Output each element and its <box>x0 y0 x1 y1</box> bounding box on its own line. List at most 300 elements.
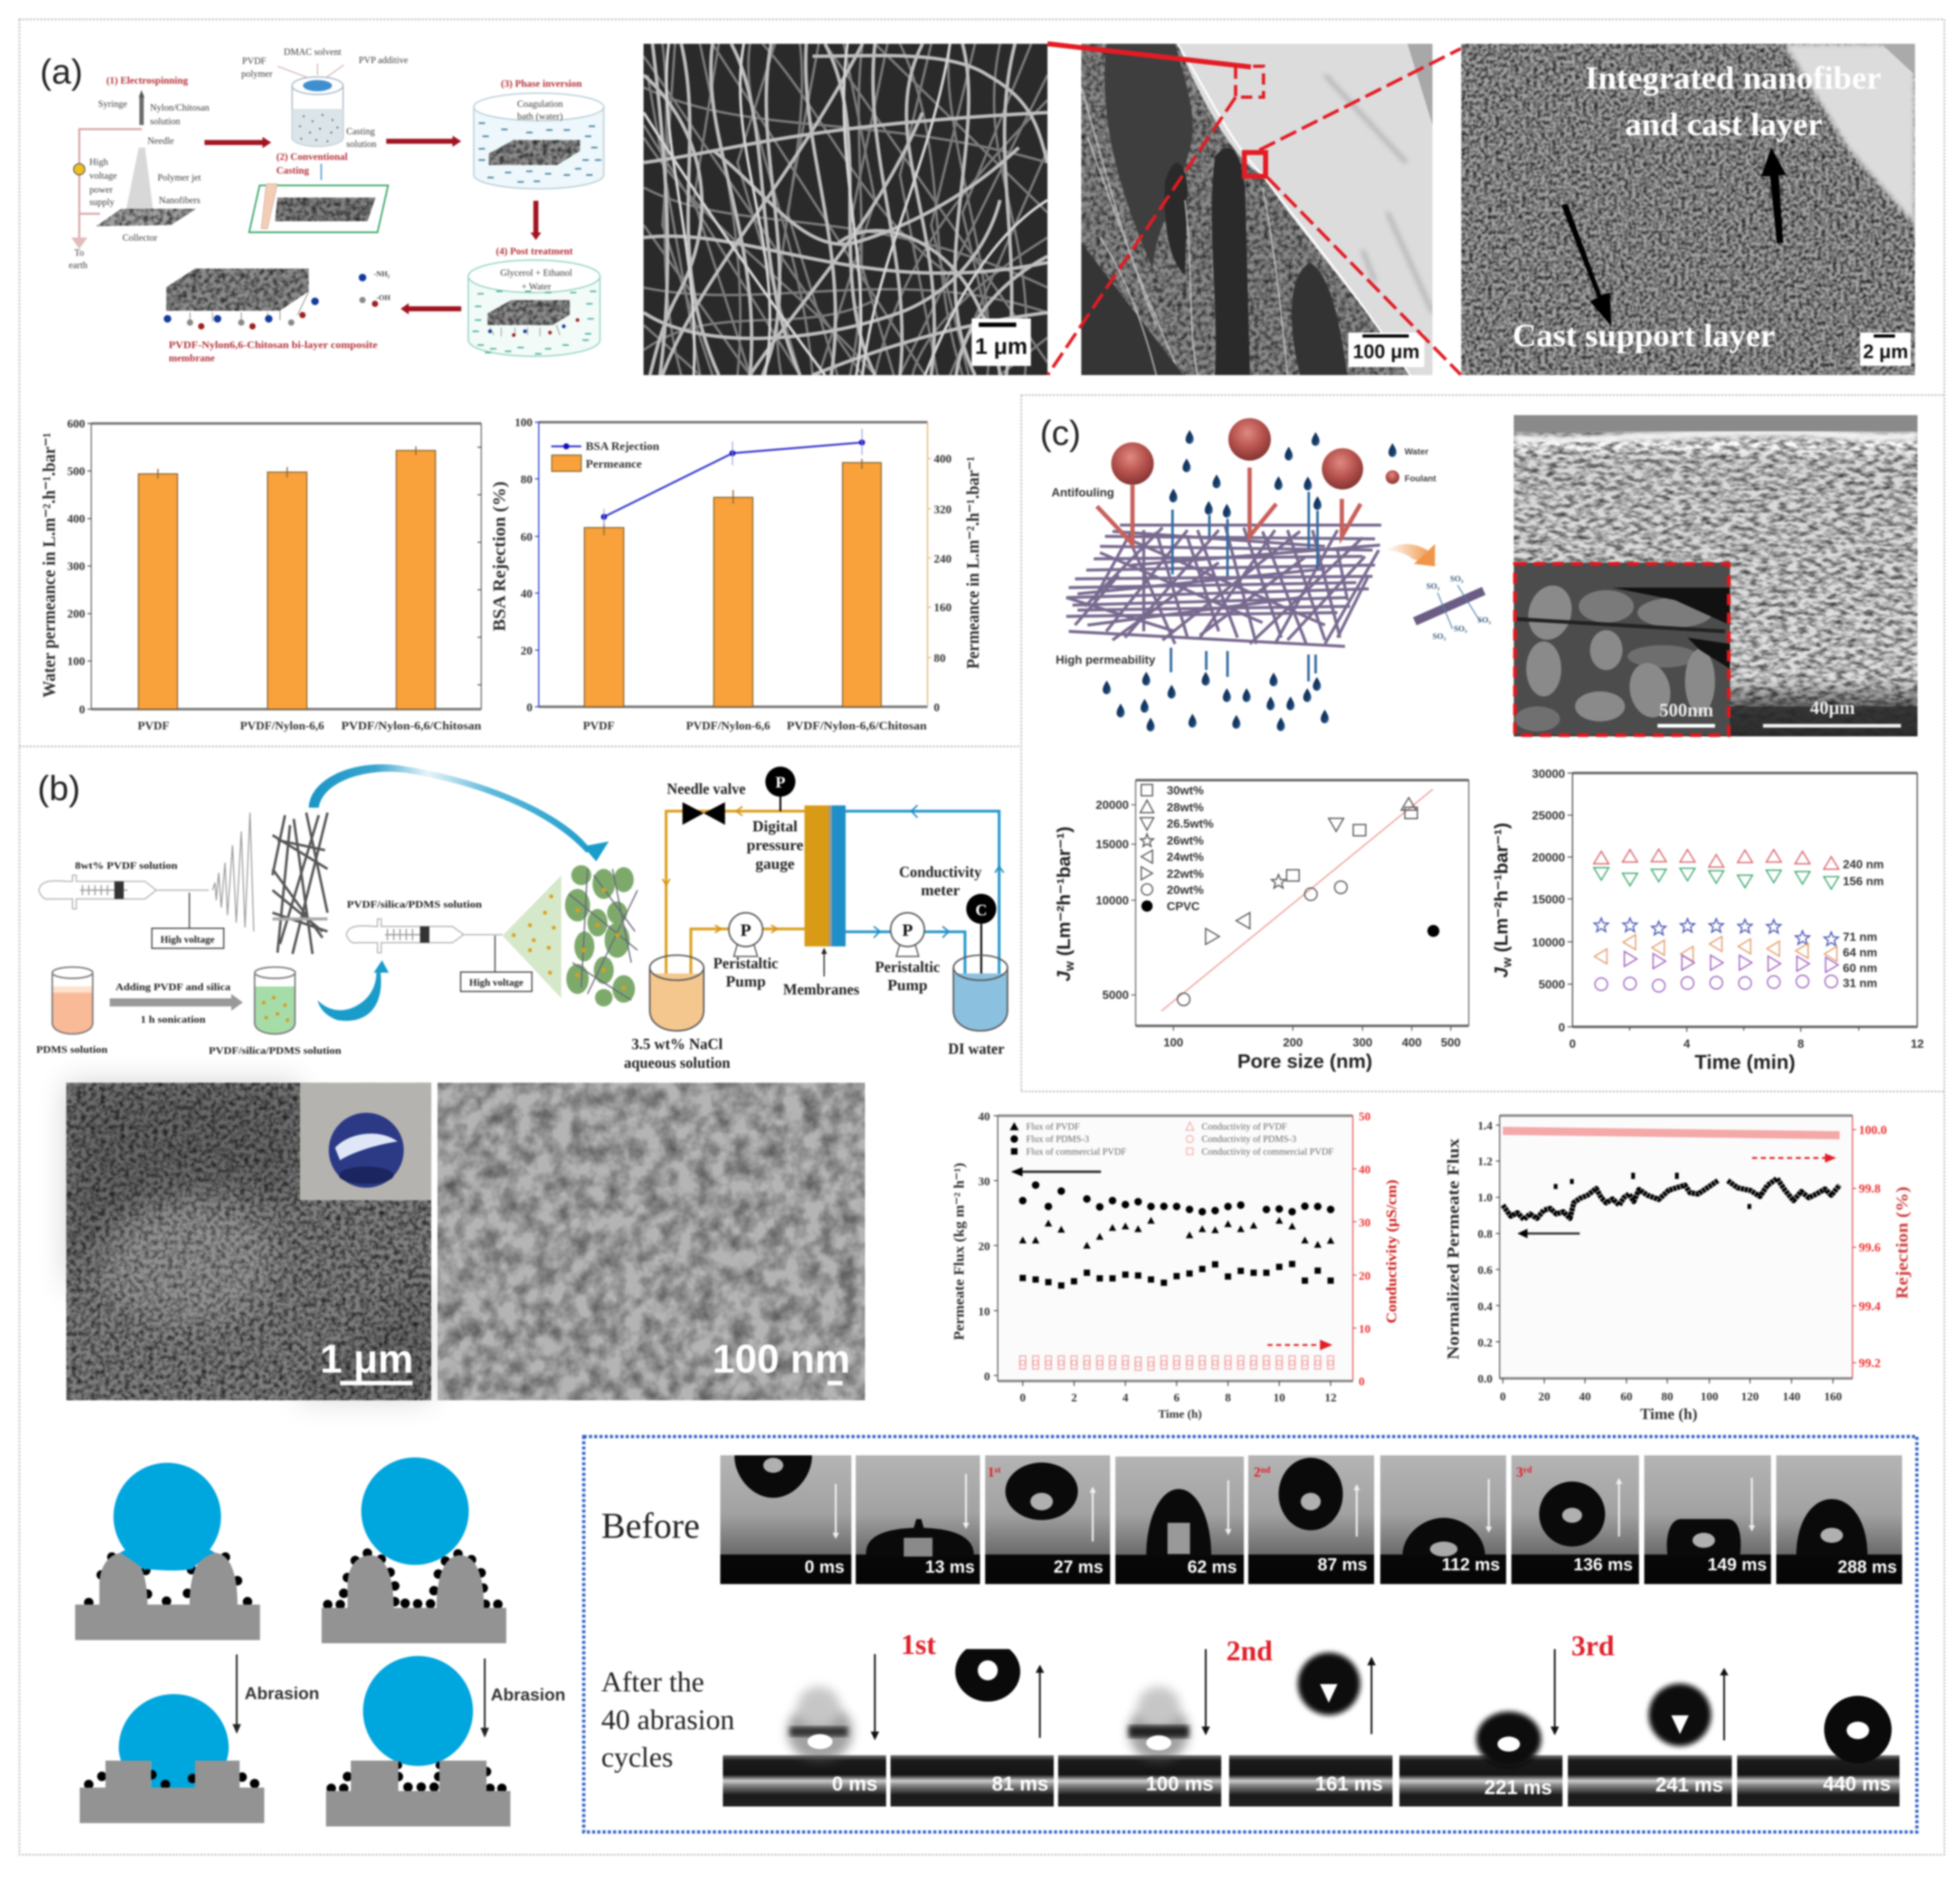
DI water tank <box>948 955 1007 1058</box>
step 2: casting solution beaker: DMAC solvent <box>284 46 341 57</box>
schematic: before abrasion, left <box>75 1463 260 1640</box>
scatter chart: flux vs time: 15000 <box>1532 893 1565 906</box>
bar chart: water permeance: 500 <box>67 464 85 478</box>
time stamps: 161 ms <box>1315 1773 1383 1795</box>
scale label: 100 nm <box>712 1337 850 1382</box>
legend: 24wt% <box>1167 850 1204 864</box>
scatter chart: permeate flux and conductivity: 10 <box>1359 1322 1371 1335</box>
foulant rebound arrows <box>1097 468 1360 544</box>
line chart: normalized flux and rejection: 99.2 <box>1859 1357 1881 1370</box>
rejection line <box>604 442 862 517</box>
step 1: electrospinning: voltage <box>89 170 117 181</box>
step 4: post treatment bath: (4) Post treatment <box>496 246 573 257</box>
foulant spheres <box>1111 418 1363 489</box>
step 4: post treatment bath: + Water <box>521 281 551 291</box>
line chart: normalized flux and rejection: 140 <box>1783 1390 1801 1403</box>
SEM inset: 500nm <box>1659 699 1714 721</box>
label: after the 40 abrasion cycles: 40 abrasion <box>601 1703 735 1736</box>
conductivity meter: meter <box>921 882 960 899</box>
scatter chart: permeate flux and conductivity: 10 <box>1273 1391 1285 1404</box>
line chart: normalized flux and rejection: Rejection (%) <box>1893 1187 1911 1299</box>
droplet panel frame <box>584 1437 1917 1832</box>
pressure gauge: Digital <box>753 818 797 835</box>
rejection band <box>1503 1131 1840 1135</box>
time stamps: 27 ms <box>1054 1558 1103 1577</box>
line chart: normalized flux and rejection: 0 <box>1500 1390 1506 1403</box>
scatter chart: flux vs pore size: 5000 <box>1102 989 1129 1002</box>
scatter chart: flux vs pore size: 20000 <box>1096 798 1129 811</box>
feed tank <box>624 955 730 1072</box>
step 3: phase inversion bath: Coagulation <box>517 99 563 109</box>
legend: 30wt% <box>1167 784 1204 797</box>
conductivity meter <box>899 864 996 991</box>
scale bar 1 um <box>972 318 1031 366</box>
peristaltic pump feed: Pump <box>726 973 766 990</box>
fiber close-up: SO₃ <box>1450 574 1463 583</box>
panel b: electrospinning schematic: PVDF/silica/PDMS solution <box>347 899 482 911</box>
legend: Permeance <box>586 457 642 470</box>
bounce labels: nd <box>1261 1465 1271 1475</box>
legend: Flux of commercial PVDF <box>1026 1146 1126 1156</box>
schematic legend <box>1386 443 1436 484</box>
step 1: electrospinning: earth <box>69 260 88 270</box>
line chart: normalized flux and rejection: 0.8 <box>1478 1227 1492 1240</box>
scatter chart: permeate flux and conductivity: 0 <box>1359 1374 1365 1388</box>
scatter chart: flux vs time: 8 <box>1797 1037 1804 1050</box>
series labels: 60 nm <box>1843 962 1877 975</box>
bar and line chart: BSA rejection: 60 <box>521 530 532 543</box>
small curved arrow <box>318 960 389 1021</box>
series labels: 240 nm <box>1843 858 1884 871</box>
step 1: electrospinning: Nanofibers <box>159 195 201 205</box>
scatter chart: flux vs pore size: 200 <box>1283 1036 1303 1049</box>
time stamps: 136 ms <box>1574 1555 1633 1575</box>
step 4: post treatment bath <box>468 246 600 356</box>
scatter chart: flux vs time: 30000 <box>1532 767 1565 780</box>
panel b: electrospinning schematic: 8wt% PVDF solution <box>75 860 178 871</box>
needle valve <box>667 781 746 825</box>
bouncing sequence: after <box>723 1628 1899 1806</box>
line chart: normalized flux and rejection: 80 <box>1661 1390 1673 1403</box>
schematic: after abrasion, left <box>80 1694 264 1823</box>
y axis titles: BSA Rejection (%) <box>489 481 509 631</box>
pressure gauge <box>747 766 803 873</box>
bar chart: water permeance: PVDF/Nylon-6,6/Chitosan <box>341 719 481 732</box>
panel c: membrane schematic: Antifouling <box>1051 486 1114 499</box>
legend <box>551 440 660 471</box>
legend <box>1140 784 1214 913</box>
series labels: 31 nm <box>1843 977 1877 990</box>
bar and line chart: BSA rejection: 400 <box>934 452 952 465</box>
legend <box>1010 1121 1334 1156</box>
bar and line chart: BSA rejection: Permeance in L.m⁻².h⁻¹.bar⁻¹ <box>963 457 983 669</box>
legend: 20wt% <box>1167 884 1204 897</box>
line chart: normalized flux and rejection: 60 <box>1621 1390 1632 1403</box>
labels on detail SEM <box>1512 60 1881 354</box>
droplet highlights <box>763 1458 1843 1557</box>
data points <box>1177 798 1439 1006</box>
bar and line chart: BSA rejection <box>489 416 983 732</box>
time stamps: 81 ms <box>992 1773 1049 1795</box>
legend: Flux of PDMS-3 <box>1026 1134 1089 1144</box>
peristaltic pump feed: P <box>740 921 751 940</box>
panel b: flow circuit <box>624 766 1007 1072</box>
peristaltic pump feed: Peristaltic <box>713 955 778 972</box>
SEM inset <box>1514 563 1730 735</box>
bar chart: water permeance <box>39 417 481 732</box>
bar and line chart: BSA rejection: 0 <box>527 701 532 714</box>
time stamps: 0 ms <box>805 1558 844 1577</box>
scatter chart: permeate flux and conductivity: 50 <box>1359 1110 1371 1123</box>
panel a: fabrication schematic <box>69 46 604 364</box>
bar chart: water permeance: 300 <box>67 560 85 573</box>
bounce labels <box>987 1464 1533 1480</box>
feed tank: aqueous solution <box>624 1055 730 1072</box>
step 1: electrospinning: Polymer jet <box>157 172 201 183</box>
y axis title: J <box>1491 966 1512 978</box>
panel c: membrane schematic <box>1051 418 1491 732</box>
time stamps: 112 ms <box>1442 1555 1500 1575</box>
scale bar 100 um <box>1348 333 1424 367</box>
membranes label <box>783 947 859 998</box>
scatter chart: permeate flux and conductivity: 6 <box>1174 1391 1179 1404</box>
scatter chart: permeate flux and conductivity <box>951 1110 1400 1420</box>
needle valve: Needle valve <box>667 781 746 798</box>
scatter chart: permeate flux and conductivity: 4 <box>1122 1391 1128 1404</box>
scatter chart: permeate flux and conductivity: 40 <box>1359 1163 1371 1176</box>
scale bar 2 um: 2 μm <box>1863 341 1908 363</box>
scatter chart: flux vs time: 0 <box>1569 1037 1576 1050</box>
flux series <box>1023 1185 1330 1285</box>
step 2: casting solution beaker: PVDF <box>242 55 266 66</box>
bar and line chart: BSA rejection: 20 <box>521 644 532 657</box>
line chart: normalized flux and rejection: Time (h) <box>1640 1406 1697 1423</box>
panel label (a): (a) <box>40 53 83 92</box>
water droplets <box>1103 430 1329 732</box>
abrasion arrow right: Abrasion <box>491 1684 566 1704</box>
scatter chart: flux vs time: 12 <box>1910 1037 1924 1050</box>
time stamps: 288 ms <box>1838 1558 1897 1577</box>
legend: 22wt% <box>1167 867 1204 880</box>
scatter chart: permeate flux and conductivity: 0 <box>1020 1391 1026 1404</box>
process arrow <box>110 982 243 1026</box>
time stamps: 221 ms <box>1485 1777 1552 1799</box>
scatter chart: flux vs time <box>1491 767 1924 1074</box>
high voltage box 2: High voltage <box>469 978 524 989</box>
scatter chart: flux vs time: 5000 <box>1538 978 1565 991</box>
label: before: Before <box>601 1505 700 1546</box>
step 3: phase inversion bath <box>474 79 604 189</box>
step 4: post treatment bath: Glycerol + Ethanol <box>500 267 572 278</box>
time stamps: 62 ms <box>1187 1558 1237 1577</box>
series labels <box>1843 858 1884 990</box>
label: after the 40 abrasion cycles: After the <box>601 1666 704 1698</box>
line chart: normalized flux and rejection: 99.4 <box>1859 1300 1881 1313</box>
scatter chart: flux vs time: 25000 <box>1532 809 1565 822</box>
scatter chart: permeate flux and conductivity: 8 <box>1225 1391 1231 1404</box>
series labels: 156 nm <box>1843 875 1884 888</box>
panel label (b): (b) <box>37 769 80 808</box>
scatter chart: flux vs pore size <box>1053 780 1469 1072</box>
line chart: normalized flux and rejection: 1.4 <box>1478 1119 1492 1132</box>
high voltage box 2 <box>461 972 532 991</box>
line chart: normalized flux and rejection: 0.2 <box>1478 1336 1492 1349</box>
legend: Conductivity of PVDF <box>1202 1121 1287 1132</box>
scatter chart: permeate flux and conductivity: 20 <box>978 1240 990 1253</box>
syringe 1 <box>39 875 209 909</box>
nanofiber mat <box>272 813 328 954</box>
scatter chart: flux vs pore size: 500 <box>1441 1036 1461 1049</box>
line chart: normalized flux and rejection: 0.4 <box>1478 1300 1492 1313</box>
schematic: before abrasion, right <box>321 1457 506 1643</box>
scatter chart: permeate flux and conductivity: 12 <box>1325 1391 1337 1404</box>
bounce labels: 3rd <box>1571 1629 1614 1662</box>
step 2: casting solution beaker: (2) Conventional <box>276 151 348 163</box>
step 1: electrospinning: supply <box>89 196 115 207</box>
label: after the 40 abrasion cycles: cycles <box>601 1741 673 1773</box>
bar and line chart: BSA rejection: PVDF/Nylon-6,6 <box>686 719 770 732</box>
composite membrane: membrane <box>169 353 215 364</box>
line chart: normalized flux and rejection: 0.0 <box>1478 1372 1492 1386</box>
fiber close-up: SO₃ <box>1454 624 1467 633</box>
peristaltic pump permeate: Peristaltic <box>875 959 940 976</box>
bar and line chart: BSA rejection: 40 <box>521 587 532 600</box>
line chart: normalized flux and rejection: 120 <box>1741 1390 1759 1403</box>
bounce labels: 3 <box>1516 1464 1523 1480</box>
step 1: electrospinning: (1) Electrospinning <box>106 75 188 87</box>
step 2: casting solution beaker: polymer <box>241 69 272 79</box>
bar and line chart: BSA rejection: 240 <box>934 552 952 565</box>
peristaltic pump permeate <box>875 913 940 994</box>
step 1: electrospinning: Nylon/Chitosan <box>150 102 210 113</box>
composite membrane: -OH <box>376 293 391 302</box>
water flow lines <box>1171 492 1318 681</box>
pressure gauge: P <box>775 773 785 791</box>
zoom callout lines <box>1048 44 1461 375</box>
PVDF silica PDMS vial: PVDF/silica/PDMS solution <box>209 1046 341 1057</box>
scatter chart: flux vs time: 4 <box>1683 1037 1690 1050</box>
bar and line chart: BSA rejection: 80 <box>934 651 946 665</box>
step 3: phase inversion bath: bath (water) <box>517 111 563 121</box>
high voltage box 1 <box>152 928 224 949</box>
legend: Conductivity of PDMS-3 <box>1202 1134 1297 1144</box>
labels on detail SEM: and cast layer <box>1625 107 1822 143</box>
line chart: normalized flux and rejection: 100.0 <box>1859 1123 1887 1137</box>
y axis title: J <box>1053 970 1074 981</box>
time stamps <box>832 1773 1891 1799</box>
bar chart: water permeance: 100 <box>67 655 85 668</box>
time stamps: 149 ms <box>1708 1555 1767 1575</box>
feed loop <box>666 811 804 1005</box>
abrasion arrow left <box>233 1654 319 1734</box>
scatter chart: flux vs time: 0 <box>1558 1021 1565 1034</box>
droplets <box>735 1455 1868 1557</box>
SEM: membrane cross-section <box>1514 415 1917 736</box>
composite membrane: PVDF-Nylon6,6-Chitosan bi-layer composite <box>169 340 377 351</box>
legend: Flux of PVDF <box>1026 1121 1080 1132</box>
bar and line chart: BSA rejection: PVDF <box>583 719 615 732</box>
bounce labels: 2 <box>1254 1464 1261 1480</box>
conductivity meter: Conductivity <box>899 864 982 881</box>
time stamps: 87 ms <box>1318 1555 1367 1575</box>
line chart: normalized flux and rejection: 0.6 <box>1478 1264 1492 1277</box>
SEM right: soft surface <box>437 1083 865 1400</box>
legend: 28wt% <box>1167 801 1204 814</box>
scale bar 100 um: 100 μm <box>1353 341 1420 363</box>
x axis title: Time (min) <box>1695 1051 1795 1074</box>
series <box>1601 856 1831 985</box>
droplets and ghosts <box>787 1642 1891 1767</box>
bar and line chart: BSA rejection: PVDF/Nylon-6,6/Chitosan <box>787 719 927 732</box>
series labels: 71 nm <box>1843 930 1877 943</box>
peristaltic pump permeate: P <box>902 921 913 940</box>
bounce labels <box>901 1628 1614 1667</box>
panel c: membrane schematic: High permeability <box>1056 653 1156 667</box>
bounce labels: 1 <box>987 1464 994 1480</box>
bounce labels: st <box>994 1465 1001 1475</box>
line chart: normalized flux and rejection: 1.0 <box>1478 1191 1492 1204</box>
schematic legend: Foulant <box>1404 473 1436 484</box>
legend: BSA Rejection <box>586 440 660 453</box>
fiber close-up: SO₃ <box>1478 616 1491 625</box>
fiber close-up: SO₃ <box>1426 582 1440 591</box>
y axis title: Water permeance in L.m⁻².h⁻¹.bar⁻¹ <box>39 433 59 698</box>
flow arrows <box>205 136 541 315</box>
step 3: phase inversion bath: (3) Phase inversion <box>501 79 582 90</box>
scatter chart: permeate flux and conductivity: 2 <box>1071 1391 1077 1404</box>
scatter chart: permeate flux and conductivity: Conductivity (μS/cm) <box>1384 1180 1400 1323</box>
pressure gauge: gauge <box>756 856 795 873</box>
panel label (c): (c) <box>1040 414 1081 453</box>
bar chart: water permeance: 0 <box>79 703 85 716</box>
peristaltic pump permeate: Pump <box>888 977 927 994</box>
bar and line chart: BSA rejection: 160 <box>934 601 952 614</box>
scatter chart: flux vs pore size: 15000 <box>1096 838 1129 851</box>
scatter chart: permeate flux and conductivity: 30 <box>1359 1216 1371 1229</box>
schematic: after abrasion, right <box>326 1656 510 1826</box>
scatter chart: permeate flux and conductivity: 0 <box>984 1370 990 1383</box>
abrasion arrow right <box>481 1658 566 1738</box>
peristaltic pump feed <box>713 913 778 990</box>
axis titles: Permeate Flux (kg m⁻² h⁻¹) <box>951 1163 967 1340</box>
legend: 26.5wt% <box>1167 817 1214 830</box>
flux data <box>1503 1179 1840 1219</box>
step 2: casting solution beaker <box>241 46 408 232</box>
x axis title: Pore size (nm) <box>1238 1050 1372 1072</box>
bouncing sequence: before <box>720 1455 1902 1584</box>
line chart: normalized flux and rejection: 40 <box>1579 1390 1591 1403</box>
labels on detail SEM: Integrated nanofiber <box>1585 60 1881 96</box>
composite membrane <box>164 269 391 364</box>
high voltage box 1: High voltage <box>160 934 215 945</box>
y axis title: w <box>1063 961 1077 972</box>
series labels: 64 nm <box>1843 946 1877 959</box>
bar and line chart: BSA rejection: 80 <box>521 472 532 486</box>
pressure gauge: pressure <box>747 837 803 854</box>
abrasion arrow left: Abrasion <box>245 1683 319 1703</box>
SEM left: fibrous surface <box>66 1083 431 1400</box>
scale bar 1 um: 1 μm <box>975 334 1027 359</box>
bar chart: water permeance: PVDF <box>138 719 169 732</box>
fiber close-up: SO₃ <box>1432 632 1446 641</box>
composite membrane: -NH₂ <box>374 270 390 278</box>
line chart: normalized flux and rejection: 99.8 <box>1859 1182 1881 1196</box>
step 1: electrospinning: solution <box>150 116 180 127</box>
panel b: electrospinning schematic <box>36 764 638 1057</box>
DI water tank: DI water <box>948 1041 1004 1058</box>
legend: 26wt% <box>1167 834 1204 847</box>
fiber close-up <box>1385 544 1491 641</box>
process arrow: 1 h sonication <box>140 1015 206 1026</box>
scatter chart: permeate flux and conductivity: Time (h) <box>1158 1407 1202 1420</box>
time stamps: 440 ms <box>1823 1773 1891 1795</box>
scatter chart: permeate flux and conductivity: 10 <box>978 1305 990 1318</box>
large curved arrow <box>309 764 609 861</box>
SEM: nanofibers <box>643 44 1048 375</box>
conductivity series <box>1023 1363 1330 1364</box>
step 1: electrospinning <box>69 75 210 270</box>
arrows on detail SEM <box>1561 147 1786 326</box>
bar and line chart: BSA rejection: 0 <box>934 701 940 714</box>
time stamps: 100 ms <box>1146 1773 1213 1795</box>
bar and line chart: BSA rejection: 100 <box>515 416 532 429</box>
time stamps: 0 ms <box>832 1773 878 1795</box>
permeate loop <box>845 811 999 1007</box>
bar chart: water permeance: PVDF/Nylon-6,6 <box>240 719 324 732</box>
frames <box>723 1755 1899 1806</box>
syringe 2 <box>346 919 502 953</box>
black motion arrows <box>875 1649 1724 1740</box>
step 1: electrospinning: To <box>74 247 84 258</box>
legend: CPVC <box>1167 899 1200 913</box>
bounce labels: 2nd <box>1226 1635 1272 1667</box>
inset: water droplet photo <box>300 1083 431 1200</box>
y axis title: w <box>1501 957 1515 968</box>
SEM scale 40um: 40μm <box>1810 697 1855 718</box>
line chart: normalized flux and rejection: 99.6 <box>1859 1241 1881 1255</box>
step 1: electrospinning: Syringe <box>98 99 127 109</box>
axis titles: Normalized Permeate Flux <box>1444 1139 1462 1360</box>
y axis title: (Lm⁻²h⁻¹bar⁻¹) <box>1491 823 1512 958</box>
time stamps: 13 ms <box>925 1558 975 1577</box>
PDMS vial <box>36 967 108 1055</box>
scale bar 2 um <box>1860 333 1911 366</box>
fiber mesh <box>1066 525 1381 647</box>
scatter chart: permeate flux and conductivity: 20 <box>1359 1269 1371 1282</box>
electrospinning jet <box>213 813 254 932</box>
SEM: integrated layer detail <box>1461 44 1915 375</box>
legend: Conductivity of commercial PVDF <box>1202 1146 1334 1156</box>
spray cone <box>502 876 562 998</box>
time stamps <box>805 1555 1897 1577</box>
bar and line chart: BSA rejection: 320 <box>934 503 952 516</box>
line chart: normalized flux and rejection: 160 <box>1824 1390 1842 1403</box>
frames <box>720 1455 1902 1584</box>
white motion arrows <box>833 1474 1755 1542</box>
schematic legend: Water <box>1404 447 1429 457</box>
scatter chart: flux vs pore size: 100 <box>1164 1036 1183 1049</box>
scatter chart: permeate flux and conductivity: 30 <box>978 1174 990 1188</box>
PDMS vial: PDMS solution <box>36 1044 108 1055</box>
bar chart: water permeance: 600 <box>67 417 85 430</box>
bounce labels: rd <box>1523 1465 1533 1475</box>
composite beads <box>565 865 638 1007</box>
step 2: casting solution beaker: Casting <box>346 126 375 137</box>
scatter chart: flux vs pore size: 10000 <box>1096 894 1129 907</box>
scatter chart: permeate flux and conductivity: 40 <box>978 1110 990 1123</box>
step 1: electrospinning: Collector <box>122 232 157 243</box>
conductivity meter: C <box>975 901 987 919</box>
